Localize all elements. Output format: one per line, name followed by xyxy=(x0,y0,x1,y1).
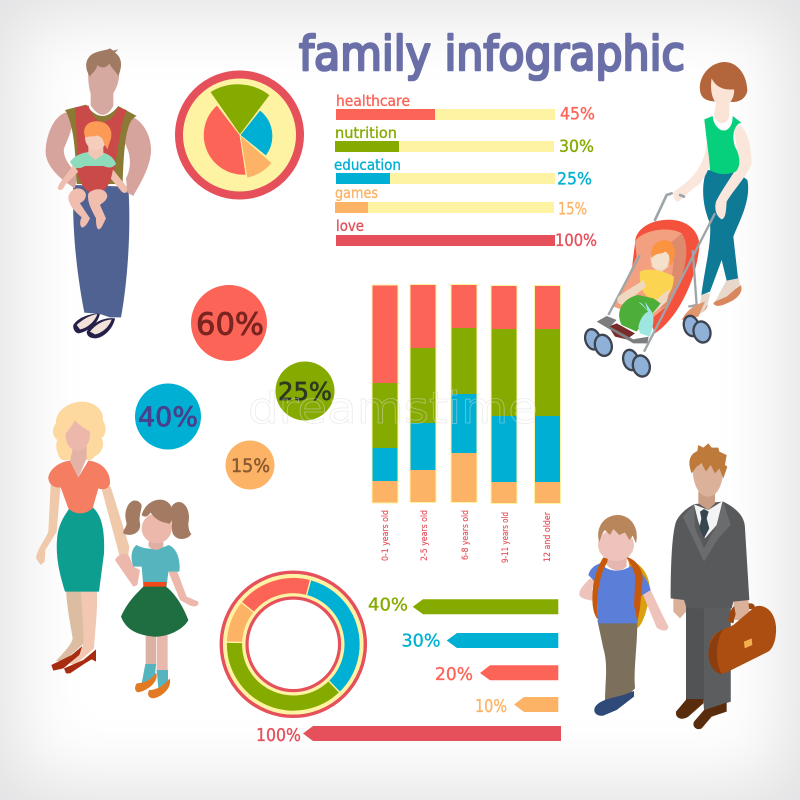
column: 0-1 years old: 0-1 years old xyxy=(381,510,391,561)
bubble: 60% xyxy=(191,285,267,361)
mother's neck and face xyxy=(70,447,87,477)
stroller xyxy=(583,193,715,378)
boy's shirt xyxy=(588,563,651,623)
donut chart xyxy=(221,572,365,716)
figure: father carrying baby xyxy=(46,48,151,338)
bar: games: 15% xyxy=(558,200,587,218)
girl's pigtails xyxy=(123,501,142,535)
bubble: 40%: 40% xyxy=(138,402,198,433)
bubble: 40% xyxy=(135,384,201,450)
bar: games: games xyxy=(335,184,378,202)
girl's socks xyxy=(142,664,168,688)
bar: games xyxy=(335,184,587,218)
bar: nutrition xyxy=(335,124,594,156)
stacked bar chart xyxy=(372,284,561,563)
bubble: 15% xyxy=(226,440,274,490)
girl's legs xyxy=(146,635,156,667)
column: 2-5 years old xyxy=(410,284,436,561)
bar: education: education xyxy=(334,156,401,174)
column: 6-8 years old xyxy=(450,284,478,560)
man's neck and face xyxy=(698,492,715,510)
bar: love xyxy=(336,217,597,250)
man's hair xyxy=(689,443,727,478)
bar: love: 100% xyxy=(555,231,597,250)
mother's face xyxy=(711,78,734,106)
boy's neck and face xyxy=(607,557,627,570)
bubble: 60%: 60% xyxy=(196,308,264,342)
girl's shoes xyxy=(135,673,157,692)
mother's legs xyxy=(56,588,84,662)
girl's shirt xyxy=(132,545,180,587)
stroller wheels xyxy=(583,314,713,378)
boy's shoes xyxy=(594,691,634,716)
arrow: 100%: 100% xyxy=(256,726,301,746)
father's neck and head xyxy=(88,61,119,115)
girl's neck and face xyxy=(148,537,163,550)
father's arms xyxy=(46,113,151,196)
bar: healthcare xyxy=(336,92,595,124)
arrow: 20% xyxy=(435,665,558,685)
pie chart xyxy=(179,74,300,196)
girl's belt xyxy=(143,582,167,587)
bubble: 15%: 15% xyxy=(231,455,270,477)
briefcase xyxy=(708,602,776,674)
father's shoes xyxy=(73,313,115,338)
mother's arms xyxy=(673,125,752,219)
column: 12 and older xyxy=(534,285,561,562)
girl's skirt xyxy=(121,587,188,637)
arrow: 40% xyxy=(368,596,558,616)
girl's hair xyxy=(142,500,173,524)
bar: love: love xyxy=(336,217,364,235)
man's jacket xyxy=(671,502,749,608)
column: 2-5 years old: 2-5 years old xyxy=(420,510,430,561)
boy's straps xyxy=(592,557,643,622)
arrows xyxy=(256,596,561,746)
watermark: dreamstime xyxy=(248,383,538,434)
mother's blouse xyxy=(48,461,110,513)
arrow: 30%: 30% xyxy=(402,632,440,652)
mother's jeans xyxy=(701,170,748,295)
arrow: 100% xyxy=(256,726,561,746)
girl's arms xyxy=(115,554,198,606)
mother's neck xyxy=(714,100,729,123)
progress bars xyxy=(334,92,597,250)
boy's trousers xyxy=(597,620,637,702)
mother's arms xyxy=(36,485,129,565)
bubble: 25%: 25% xyxy=(278,377,332,406)
column: 9-11 years old xyxy=(490,285,518,563)
mother's skirt xyxy=(57,507,104,592)
father's vest xyxy=(65,105,137,184)
title: family infographic xyxy=(299,27,685,82)
father's hair xyxy=(86,48,121,77)
mother's hair xyxy=(700,62,747,102)
boy's backpack xyxy=(628,560,650,628)
man's trousers xyxy=(686,602,731,710)
bar: healthcare: healthcare xyxy=(336,92,410,110)
stroller child xyxy=(608,240,675,339)
figure: mother and daughter xyxy=(36,402,198,698)
column: 6-8 years old: 6-8 years old xyxy=(461,510,471,560)
boy's arms xyxy=(579,578,668,631)
boy's hair xyxy=(598,515,637,543)
man's lapels xyxy=(683,502,731,562)
mother's shoes xyxy=(713,285,742,306)
man's shirt and tie xyxy=(694,501,723,538)
figure: father with son xyxy=(579,443,776,729)
bar: education: 25% xyxy=(557,170,592,188)
arrow: 40%: 40% xyxy=(368,596,408,616)
man's hands xyxy=(673,598,749,620)
man's shoes xyxy=(676,699,703,719)
father's trousers xyxy=(73,185,129,317)
arrow: 20%: 20% xyxy=(435,665,473,685)
baby xyxy=(58,121,127,229)
mother's shoes xyxy=(51,646,82,671)
mother's top xyxy=(704,116,741,174)
mother's hair xyxy=(53,402,106,460)
figure: mother pushing stroller xyxy=(583,62,752,378)
column: 0-1 years old xyxy=(372,284,398,561)
arrow: 10%: 10% xyxy=(475,697,507,717)
bar: education xyxy=(334,156,592,188)
column: 12 and older: 12 and older xyxy=(543,512,553,562)
bubble: 25% xyxy=(276,362,334,420)
arrow: 10% xyxy=(475,697,558,717)
bar: nutrition: 30% xyxy=(559,137,594,156)
bar: nutrition: nutrition xyxy=(335,124,397,142)
arrow: 30% xyxy=(402,632,558,652)
column: 9-11 years old: 9-11 years old xyxy=(501,512,511,563)
mother's legs skin xyxy=(698,277,740,315)
bar: healthcare: 45% xyxy=(560,104,595,124)
